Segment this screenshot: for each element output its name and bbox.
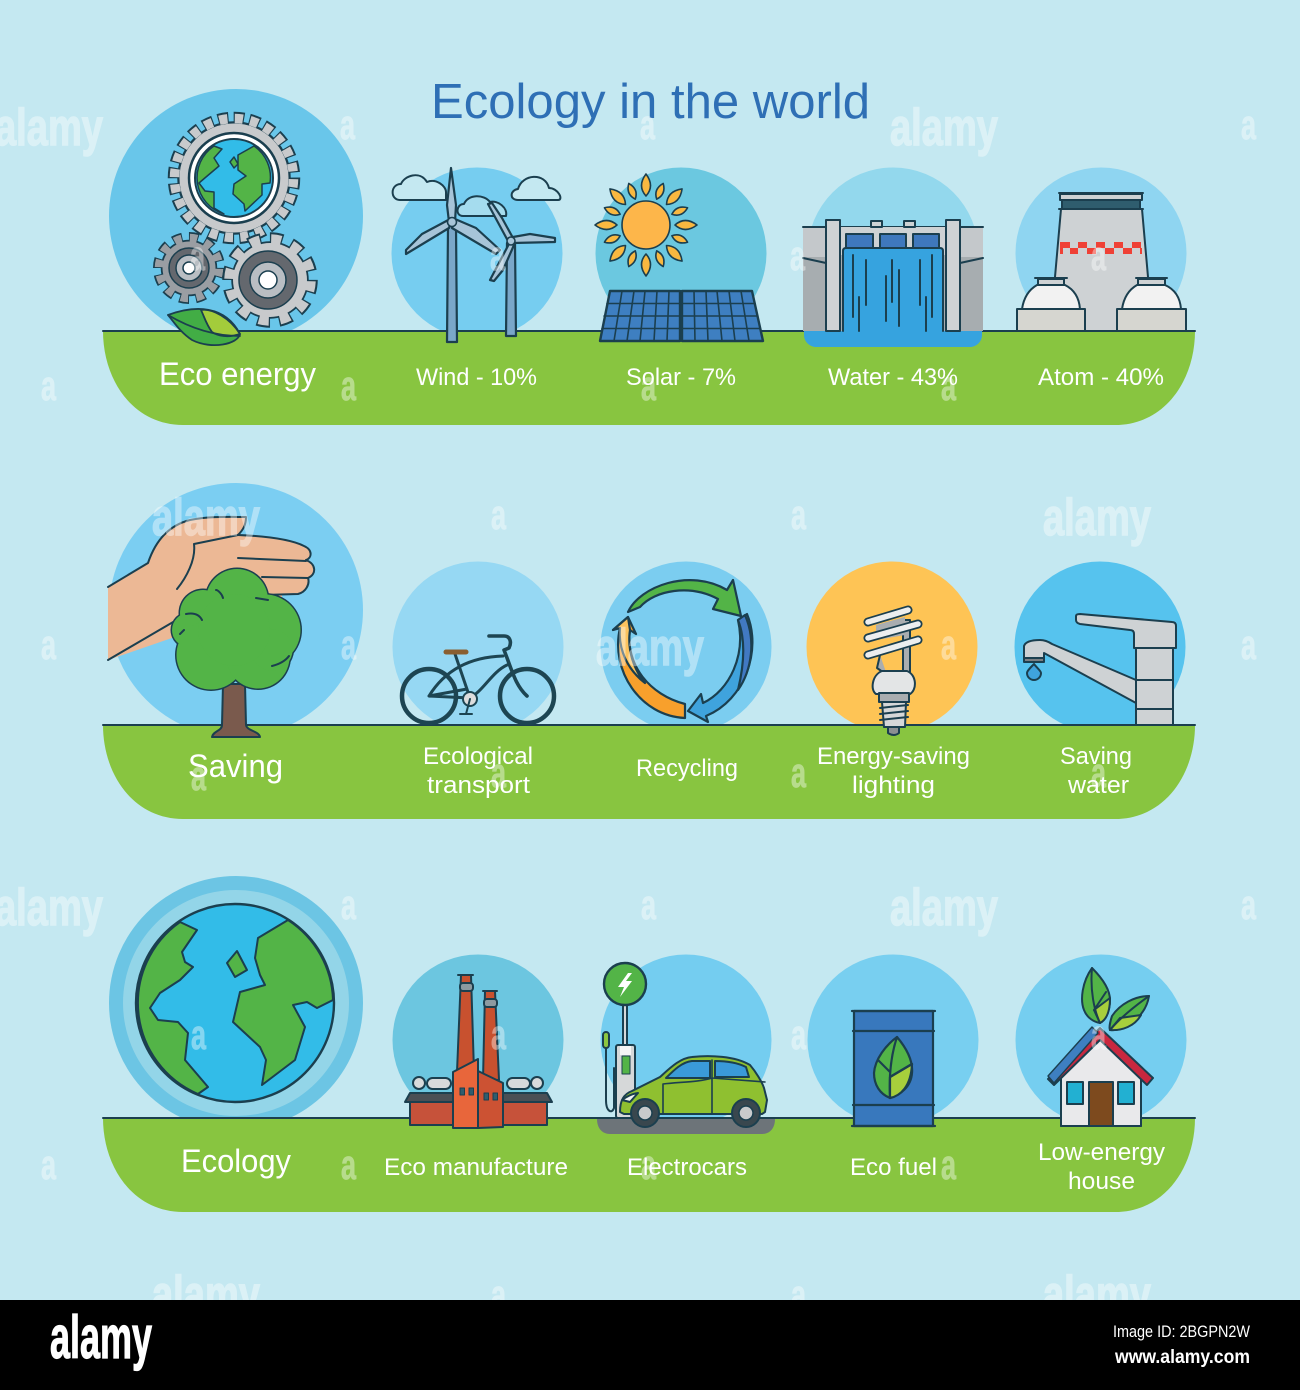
labels row 3: Electrocars <box>627 1154 747 1181</box>
watermarks: alamy <box>1043 1266 1151 1324</box>
green band row 1 <box>103 331 1195 425</box>
footer logo: alamy <box>50 1304 152 1371</box>
icon: low-energy house <box>1048 968 1153 1126</box>
watermarks: a <box>640 101 655 148</box>
circle backgrounds row 3 <box>109 876 1186 1130</box>
cloud <box>457 196 506 216</box>
watermarks: a <box>791 491 806 538</box>
labels row 2 <box>188 743 1132 799</box>
labels row 3 <box>181 1139 1165 1195</box>
labels row 3: Low-energy <box>1038 1139 1165 1166</box>
watermarks: a <box>641 1141 656 1188</box>
labels row 2: Recycling <box>636 755 738 782</box>
title: Ecology in the world <box>431 75 870 129</box>
watermarks: alamy <box>1043 489 1151 547</box>
watermarks: alamy <box>152 489 260 547</box>
labels row 2: water <box>1067 772 1129 799</box>
panel: saving <box>103 483 1195 819</box>
watermarks: a <box>641 362 656 409</box>
watermarks: a <box>191 1011 206 1058</box>
watermarks: a <box>491 1271 506 1318</box>
labels row 2: lighting <box>852 772 935 799</box>
labels row 3: Eco fuel <box>850 1154 937 1181</box>
icon: medium gear <box>229 239 311 321</box>
icon: hydroelectric dam <box>803 220 983 347</box>
labels row 3: Eco manufacture <box>384 1154 568 1181</box>
icon: eco fuel barrel <box>852 1011 935 1126</box>
watermarks: a <box>790 232 805 279</box>
labels row 3: Ecology <box>181 1143 291 1179</box>
watermarks: a <box>341 881 356 928</box>
icon: recycling arrows <box>613 580 752 722</box>
image id: Image ID: 2BGPN2W <box>1113 1322 1250 1341</box>
icon: globe <box>136 904 334 1102</box>
cloud <box>512 177 560 200</box>
panel: ecology <box>103 876 1195 1212</box>
icon: wind turbines <box>393 168 560 342</box>
labels row 1: Solar - 7% <box>626 364 736 391</box>
watermarks: a <box>491 491 506 538</box>
watermarks: alamy <box>890 99 998 157</box>
icon: road <box>597 1119 775 1134</box>
watermarks: a <box>791 749 806 796</box>
watermarks: a <box>41 621 56 668</box>
icon: nuclear plant <box>1017 193 1186 331</box>
watermarks: a <box>191 752 206 799</box>
watermarks: a <box>791 1271 806 1318</box>
watermarks: a <box>490 232 505 279</box>
watermarks: a <box>1091 1011 1106 1058</box>
labels row 1: Wind - 10% <box>416 364 537 391</box>
labels row 3: house <box>1068 1168 1135 1195</box>
icon: electric car <box>620 1056 767 1127</box>
labels row 1: Eco energy <box>159 356 316 392</box>
watermarks: alamy <box>596 619 704 677</box>
watermarks: a <box>491 1011 506 1058</box>
watermarks: a <box>340 101 355 148</box>
icon: hand <box>108 517 314 660</box>
watermarks: a <box>491 749 506 796</box>
icon: large gear with globe <box>174 118 294 238</box>
watermarks: alamy <box>152 1266 260 1324</box>
labels row 2: Ecological <box>423 743 533 770</box>
icon: energy-saving bulb <box>868 610 918 735</box>
website: www.alamy.com <box>1114 1347 1250 1368</box>
labels row 2: Saving <box>1060 743 1132 770</box>
watermarks: a <box>341 362 356 409</box>
watermarks: a <box>41 362 56 409</box>
watermarks: a <box>641 881 656 928</box>
watermarks: a <box>1241 101 1256 148</box>
watermarks: a <box>41 1141 56 1188</box>
watermarks: a <box>1241 621 1256 668</box>
labels row 2: Saving <box>188 748 283 784</box>
labels row 2: transport <box>427 772 530 799</box>
circle backgrounds row 1 <box>109 89 1186 343</box>
green band row 2 <box>103 725 1195 819</box>
icon: tree <box>170 568 302 737</box>
watermarks: a <box>1241 881 1256 928</box>
icon: solar panels <box>600 291 763 341</box>
icon: bicycle <box>402 636 554 723</box>
icon: water tap <box>1024 614 1176 725</box>
icon: sun <box>595 174 697 276</box>
watermarks: a <box>190 232 205 279</box>
icon: charging station <box>603 963 646 1118</box>
watermarks: a <box>791 1011 806 1058</box>
labels row 1 <box>159 356 1164 392</box>
labels row 1: Water - 43% <box>828 364 958 391</box>
watermarks: a <box>941 362 956 409</box>
watermarks: a <box>941 1141 956 1188</box>
watermarks: a <box>1091 749 1106 796</box>
icon: leaf <box>168 309 240 345</box>
labels row 1: Atom - 40% <box>1038 364 1164 391</box>
watermarks: a <box>1091 232 1106 279</box>
watermarks: a <box>341 621 356 668</box>
footer bar <box>0 1300 1300 1390</box>
circle backgrounds row 2 <box>109 483 1186 737</box>
labels row 2: Energy-saving <box>817 743 970 770</box>
cloud <box>393 175 446 200</box>
icon: small dark gear <box>159 238 219 298</box>
icon: factory <box>405 975 552 1128</box>
panel: eco energy <box>103 89 1195 425</box>
watermarks: a <box>341 1141 356 1188</box>
green band row 3 <box>103 1118 1195 1212</box>
watermarks: alamy <box>890 879 998 937</box>
watermarks: a <box>941 621 956 668</box>
